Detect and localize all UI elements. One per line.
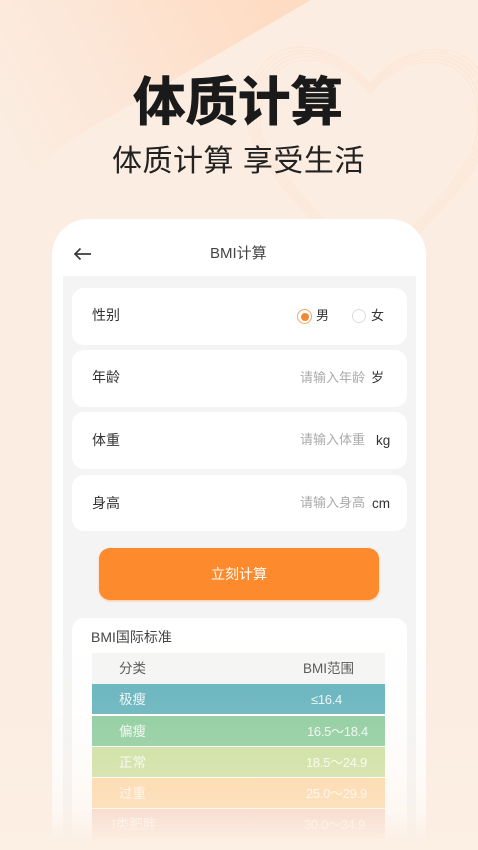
height label: 身高: [92, 495, 120, 511]
row: thin: 偏瘦: [119, 724, 146, 739]
row: normal: 18.5～24.9: [306, 755, 367, 770]
row: very thin: 极瘦: [119, 692, 146, 707]
radio: female unselected: [352, 309, 366, 323]
card: gender: [72, 288, 407, 345]
age unit: 岁: [371, 370, 384, 385]
phone mockup: [52, 219, 426, 850]
row: obese class I: I类肥胖: [112, 817, 156, 832]
card: age: [72, 350, 407, 407]
row: normal: 正常: [119, 755, 146, 770]
row: obese class I: 30.0～34.9: [304, 817, 365, 832]
subtitle: 体质计算 享受生活: [112, 145, 365, 178]
BMI table: [92, 653, 385, 836]
screen heading: BMI计算: [210, 245, 267, 262]
radio: male selected: [297, 309, 312, 324]
gender label: 性别: [92, 307, 120, 323]
male label: 男: [316, 308, 329, 323]
title: 体质计算: [133, 73, 343, 132]
height placeholder: 请输入身高: [300, 495, 365, 510]
card: weight: [72, 412, 407, 469]
row: overweight: [92, 778, 385, 808]
table header: BMI范围: [303, 661, 354, 676]
panel heading: BMI国际标准: [91, 629, 172, 645]
row: thin: 16.5～18.4: [307, 724, 368, 739]
row: thin: [92, 716, 385, 746]
age label: 年龄: [92, 369, 120, 385]
calculate button: [99, 548, 379, 600]
grey screen background: [63, 276, 416, 850]
weight placeholder: 请输入体重: [300, 432, 365, 447]
row: overweight: 过重: [119, 786, 146, 801]
row: very thin: ≤16.4: [311, 692, 342, 707]
female label: 女: [371, 308, 384, 323]
back arrow icon: [74, 248, 91, 260]
row: very thin: [92, 684, 385, 714]
row: overweight: 25.0～29.9: [306, 786, 367, 801]
bottom fade overlay: [0, 625, 478, 850]
table header: [92, 653, 385, 684]
age placeholder: 请输入年龄: [300, 370, 365, 385]
row: obese class I: [92, 809, 385, 839]
height unit: cm: [372, 496, 390, 511]
table header: 分类: [119, 661, 146, 676]
weight unit: kg: [376, 433, 390, 448]
weight label: 体重: [92, 432, 120, 448]
calculate button: 立刻计算: [211, 566, 267, 582]
panel: BMI standard: [72, 618, 407, 850]
row: normal: [92, 747, 385, 777]
card: height: [72, 475, 407, 531]
